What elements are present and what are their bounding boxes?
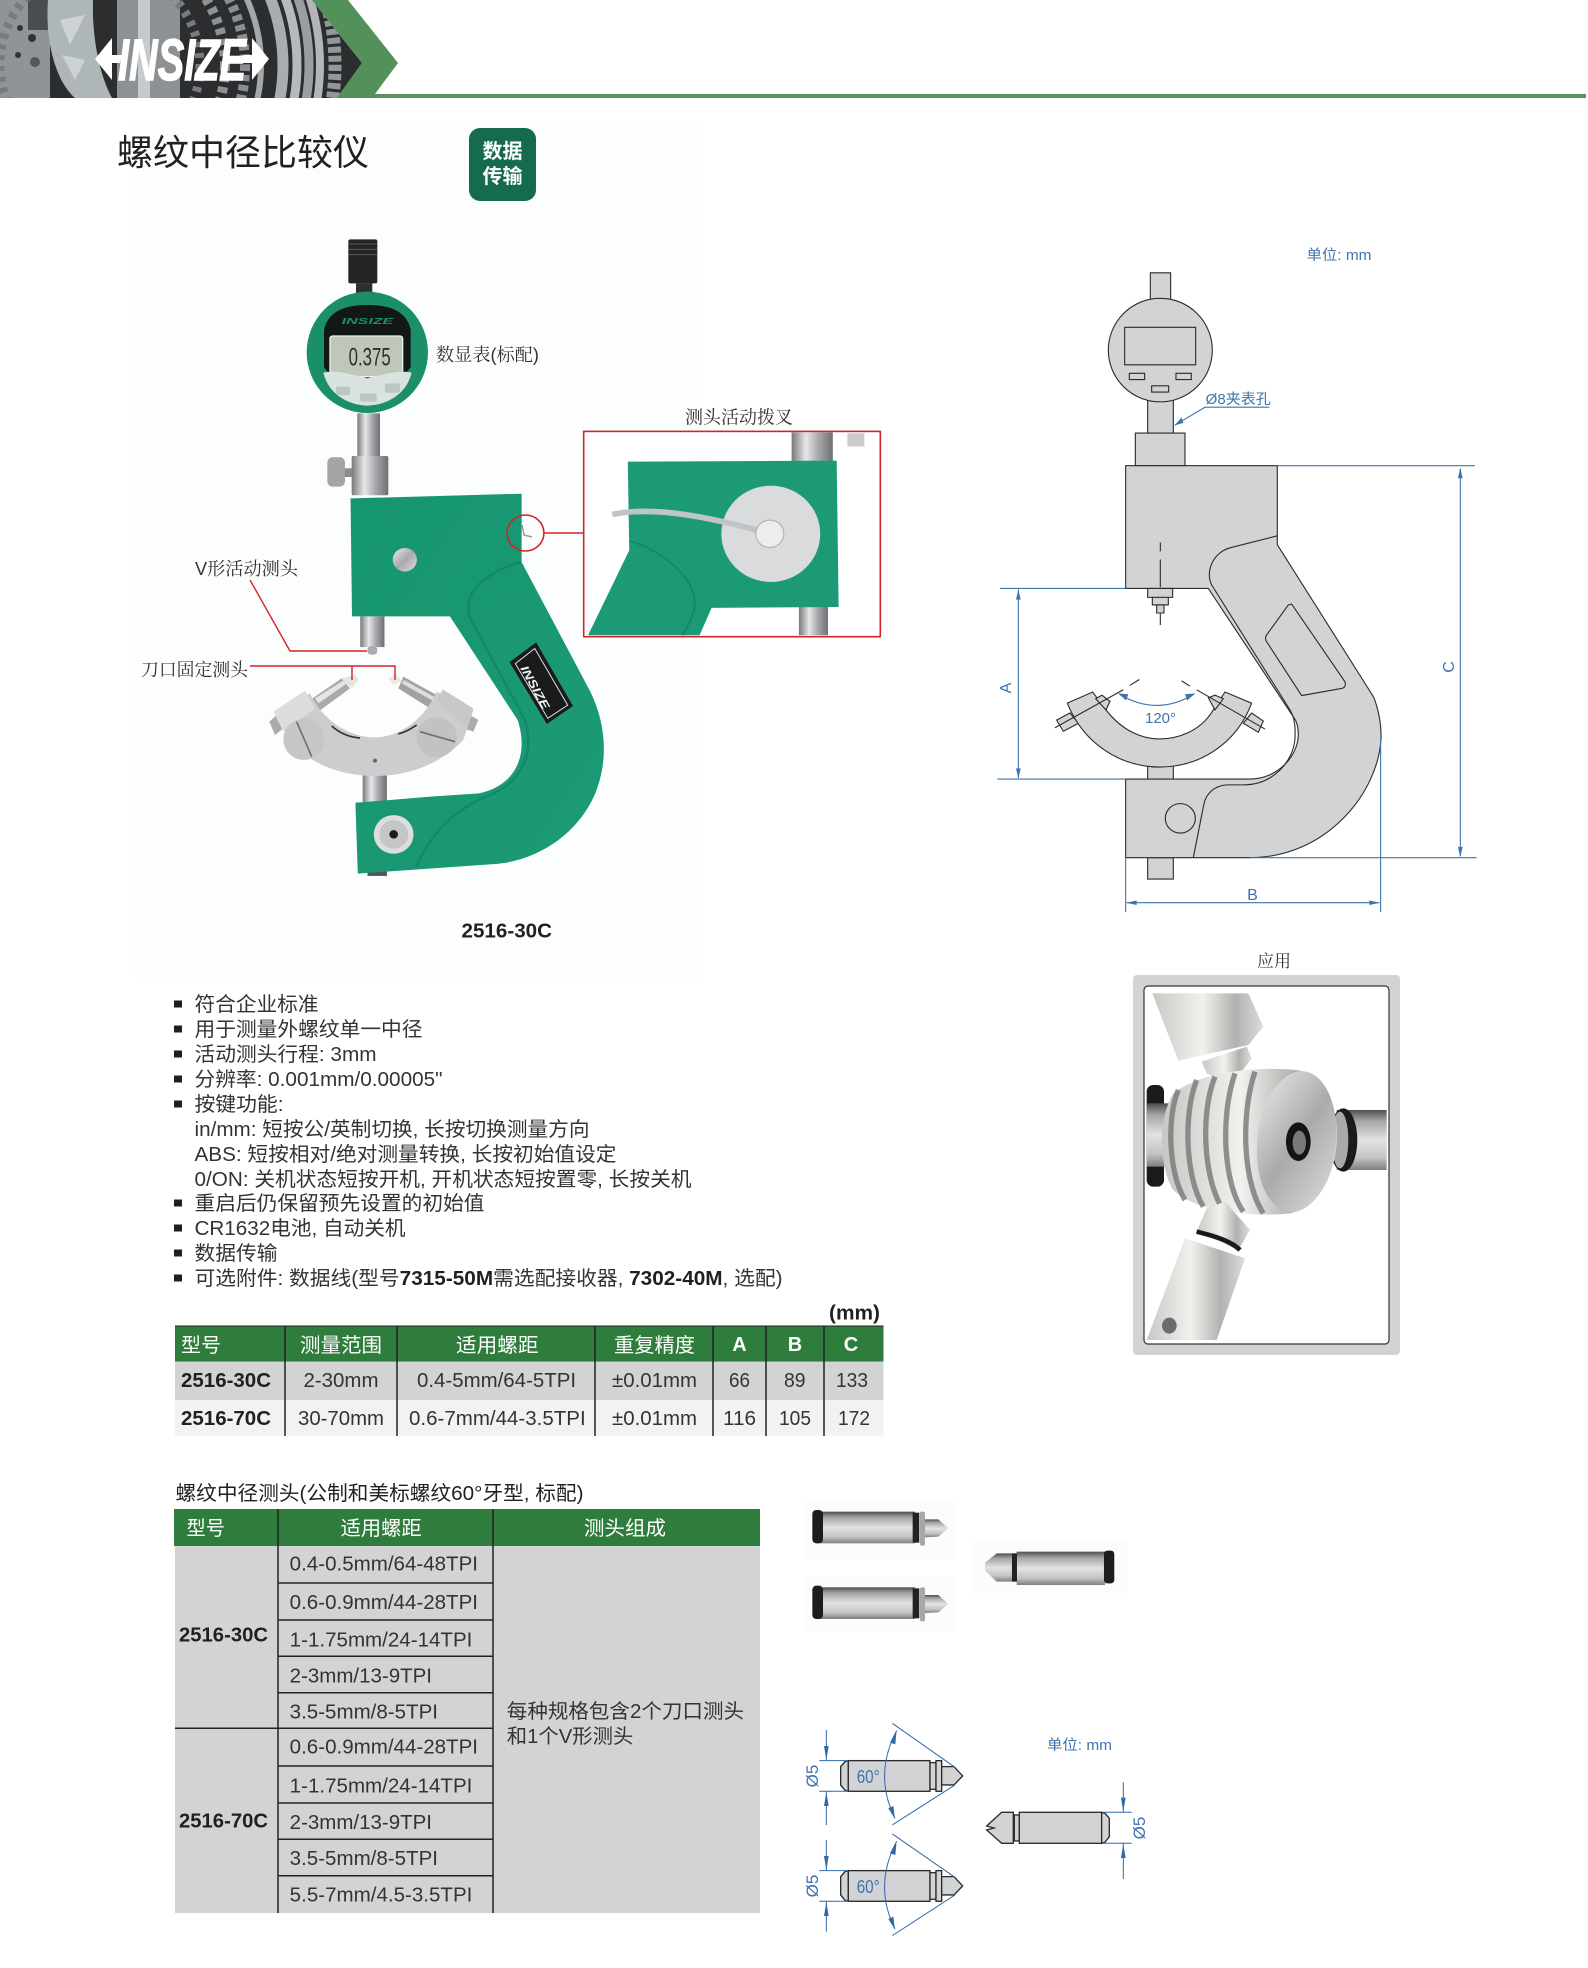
V holder with fixed probes	[269, 673, 478, 776]
feature list: 活动测头行程: 3mm	[194, 1043, 376, 1066]
green chevron	[312, 0, 398, 98]
table header: 测量范围	[300, 1334, 382, 1357]
dimension text: Ø5	[803, 1765, 822, 1787]
small lever tip in circle	[522, 525, 532, 537]
collar	[352, 456, 388, 495]
probe photos	[805, 1500, 1127, 1632]
pitch cells: 1-1.75mm/24-14TPI	[290, 1776, 472, 1798]
detail inset: movable probe lever	[584, 431, 880, 637]
table header: A	[732, 1334, 747, 1356]
V-probe photo lower	[812, 1586, 948, 1621]
model cells: 2516-30C	[179, 1624, 268, 1646]
title: 螺纹中径比较仪	[117, 132, 369, 173]
label: fixed probes with leader: 刀口固定测头	[141, 660, 249, 680]
row 2516-70C	[181, 1408, 870, 1430]
frame body	[1126, 466, 1381, 858]
knife probe drawing	[987, 1812, 1109, 1843]
digital indicator on stem	[307, 239, 428, 495]
dimension labels: Ø8夹表孔	[1206, 391, 1271, 408]
table header: C	[844, 1334, 858, 1356]
application photo	[1147, 993, 1387, 1340]
white photo frame	[1144, 986, 1389, 1344]
V-probe photo upper	[812, 1510, 948, 1546]
row 2516-70C: 105	[779, 1408, 811, 1430]
feature list: 按键功能:	[194, 1093, 284, 1116]
probe dimension drawings	[803, 1723, 1149, 1936]
feature list: 0/ON: 关机状态短按开机, 开机状态短按置零, 长按关机	[194, 1168, 692, 1191]
probe table header	[186, 1517, 666, 1540]
feature list: ABS: 短按相对/绝对测量转换, 长按初始值设定	[194, 1143, 616, 1166]
V-probe drawing upper	[841, 1761, 963, 1791]
header banner	[0, 0, 1586, 98]
dimension text: Ø5	[1130, 1817, 1149, 1839]
feature list: 可选附件: 数据线(型号 7315-50M需选配接收器, 7302-40M, 选配)	[194, 1267, 782, 1290]
callout circle and connector	[507, 515, 584, 551]
probe table header: 测头组成	[584, 1517, 666, 1540]
badge: data transfer	[469, 128, 536, 201]
label: V probe with leader	[195, 559, 367, 651]
row 2516-30C: 0.4-5mm/64-5TPI	[417, 1370, 576, 1392]
row 2516-70C: 2516-70C	[181, 1408, 271, 1430]
pitch cells: 1-1.75mm/24-14TPI	[290, 1630, 472, 1652]
pitch cells: 3.5-5mm/8-5TPI	[290, 1848, 438, 1870]
composition cell: 每种规格包含2个刀口测头	[507, 1700, 744, 1723]
bullets	[174, 1000, 182, 1282]
product photo: thread pitch comparator	[351, 494, 604, 876]
steel button	[393, 548, 417, 572]
clamp screws	[283, 717, 457, 760]
green rule	[375, 94, 1586, 98]
probe table	[174, 1509, 760, 1913]
dimension text	[803, 1765, 1149, 1897]
V holder arc	[1055, 680, 1265, 767]
unit label: 单位: mm	[1047, 1737, 1112, 1754]
nameplate	[510, 642, 573, 724]
row 2516-70C: 30-70mm	[298, 1408, 384, 1430]
table header: 重复精度	[614, 1334, 695, 1357]
row 2516-30C: 66	[729, 1370, 750, 1392]
end pins	[269, 715, 478, 735]
pitch cells: 0.4-0.5mm/64-48TPI	[290, 1554, 478, 1576]
label: V probe with leader: V形活动测头	[195, 559, 299, 579]
spindles	[360, 616, 387, 876]
dial body	[307, 292, 428, 413]
dimension labels: 120°	[1145, 710, 1176, 727]
disc	[721, 486, 820, 582]
blue dimension lines	[997, 407, 1477, 912]
row 2516-30C: 2-30mm	[304, 1370, 378, 1392]
lever	[612, 511, 770, 534]
machinery photo	[0, 0, 362, 98]
row 2516-70C: 0.6-7mm/44-3.5TPI	[409, 1408, 586, 1430]
crescent body	[277, 692, 473, 776]
label: application: 应用	[1257, 952, 1291, 971]
feature list: CR1632电池, 自动关机	[194, 1217, 406, 1240]
lower knob	[374, 815, 414, 854]
pitch cells: 5.5-7mm/4.5-3.5TPI	[290, 1884, 472, 1906]
table header: 适用螺距	[456, 1334, 538, 1357]
row 2516-30C	[181, 1370, 868, 1392]
pitch cells: 0.6-0.9mm/44-28TPI	[290, 1736, 478, 1758]
badge: data transfer: 数据	[482, 140, 522, 163]
unit note: (mm)	[829, 1302, 880, 1324]
pitch cells: 2-3mm/13-9TPI	[290, 1812, 432, 1834]
composition cell	[507, 1700, 744, 1748]
inner shadow	[332, 725, 417, 738]
faint photo background	[134, 125, 703, 977]
feature list: 符合企业标准	[194, 993, 318, 1016]
table header	[181, 1334, 858, 1357]
nameplate: INSIZE	[517, 664, 551, 712]
model label: 2516-30C	[462, 920, 552, 942]
pitch cells: 0.6-0.9mm/44-28TPI	[290, 1592, 478, 1614]
pitch cells: 2-3mm/13-9TPI	[290, 1666, 432, 1688]
row 2516-70C: ±0.01mm	[612, 1408, 697, 1430]
row 2516-30C: 89	[784, 1370, 806, 1392]
feature list: 分辨率: 0.001mm/0.00005"	[194, 1068, 442, 1091]
row 2516-30C: 2516-30C	[181, 1370, 271, 1392]
model cells	[179, 1624, 268, 1832]
unit label: 单位: mm	[1306, 247, 1372, 264]
dimension text: 60°	[857, 1767, 880, 1787]
application panel	[1133, 952, 1400, 1355]
feature list	[174, 993, 782, 1290]
stem	[357, 413, 380, 457]
clamp blocks	[273, 689, 473, 732]
dimension text: 60°	[857, 1877, 880, 1897]
indicator dial	[1108, 298, 1212, 402]
table header: 型号	[181, 1334, 221, 1357]
feature list: in/mm: 短按公/英制切换, 长按切换测量方向	[194, 1118, 590, 1141]
ribbed cap	[348, 239, 377, 294]
dimension labels	[998, 391, 1458, 904]
row 2516-70C: 172	[838, 1408, 870, 1430]
dimension labels: B	[1247, 887, 1258, 904]
table header: B	[788, 1334, 802, 1356]
dial body: 0.375	[349, 343, 391, 371]
label: digital indicator: 数显表(标配)	[436, 345, 539, 365]
feature list: 用于测量外螺纹单一中径	[194, 1018, 422, 1041]
feature list: 重启后仍保留预先设置的初始值	[194, 1192, 484, 1215]
specification table	[175, 1326, 884, 1436]
dimension drawing	[997, 247, 1477, 912]
badge: data transfer: 传输	[482, 165, 522, 188]
label: lever: 测头活动拨叉	[685, 408, 793, 428]
knife probe photo	[985, 1551, 1114, 1585]
fixed probes	[310, 673, 437, 712]
movable probe	[1148, 588, 1173, 625]
frame recess shading	[416, 562, 528, 867]
probe table heading: 螺纹中径测头(公制和美标螺纹60°牙型, 标配)	[176, 1482, 584, 1505]
label: fixed probes with leader	[141, 660, 395, 680]
centre hole	[373, 759, 377, 763]
gray frame	[1133, 975, 1400, 1355]
dial body: INSIZE	[342, 316, 394, 326]
dimension labels: A	[998, 682, 1015, 693]
green C frame	[351, 494, 604, 874]
frame detail lines	[1160, 536, 1345, 858]
indicator stem parts	[1135, 273, 1185, 879]
pitch cells: 3.5-5mm/8-5TPI	[290, 1702, 438, 1724]
row 2516-30C: 133	[836, 1370, 868, 1392]
pitch cells	[290, 1554, 478, 1906]
clamp knob	[327, 457, 353, 487]
composition cell: 和1个V形测头	[507, 1725, 633, 1748]
green block	[588, 461, 839, 635]
lever ball	[756, 520, 784, 547]
V-probe drawing lower	[841, 1871, 963, 1901]
dimension text: Ø5	[803, 1875, 822, 1897]
row 2516-30C: ±0.01mm	[612, 1370, 697, 1392]
dimension labels: C	[1441, 661, 1458, 673]
feature list: 数据传输	[194, 1242, 278, 1265]
model cells: 2516-70C	[179, 1810, 268, 1832]
logo: INSIZE: INSIZE	[118, 28, 248, 93]
blue dimension lines	[819, 1723, 1132, 1936]
probe table header: 型号	[186, 1517, 225, 1540]
steel shafts	[792, 432, 864, 635]
row 2516-70C: 116	[723, 1408, 756, 1430]
probe table header: 适用螺距	[341, 1517, 422, 1540]
